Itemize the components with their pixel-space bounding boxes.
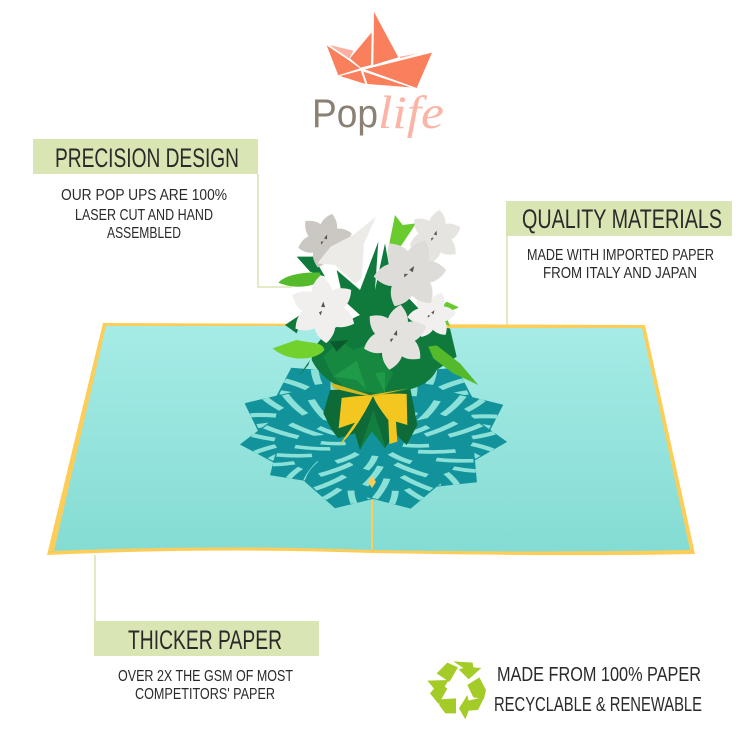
callout: precision design [33, 139, 258, 242]
bright leaves [278, 272, 322, 287]
white lilies [290, 207, 360, 275]
stems [323, 387, 417, 450]
bouquet [273, 205, 478, 450]
leaves dark [312, 242, 457, 394]
icon: paper boat [327, 12, 432, 88]
heading: THICKER PAPER [128, 625, 282, 655]
heading band [33, 139, 258, 174]
body text: LASER CUT AND HAND [75, 207, 213, 224]
stem highlight [360, 410, 386, 449]
connector lines [95, 174, 507, 621]
body text: OUR POP UPS ARE 100% [61, 187, 227, 204]
heading: PRECISION DESIGN [55, 143, 239, 173]
body text: COMPETITORS' PAPER [135, 686, 275, 703]
card yellow backing [47, 323, 695, 555]
pop-up card [47, 205, 695, 555]
body text [118, 668, 293, 703]
card teal right panel [373, 328, 690, 552]
body text [61, 187, 227, 242]
mid leaves [323, 340, 393, 393]
back leaves [285, 257, 325, 377]
callout: quality materials [506, 201, 732, 282]
logo: Poplife [312, 12, 444, 139]
lily: side trumpet [317, 217, 376, 283]
wordmark life: life [378, 87, 444, 139]
card teal left panel [54, 326, 371, 551]
bow [339, 394, 407, 446]
body text: ASSEMBLED [107, 225, 181, 242]
mandala cut-out [224, 353, 523, 515]
callout: thicker paper [94, 621, 319, 703]
wordmark Pop: Pop [312, 92, 378, 136]
centre slot diamond [368, 476, 376, 488]
body text [527, 247, 714, 282]
heading band [506, 201, 732, 236]
recycling note [427, 661, 702, 719]
heading band [94, 621, 319, 656]
ribbon band [331, 383, 408, 397]
icon: recycle arrows [427, 661, 486, 719]
body text: OVER 2X THE GSM OF MOST [118, 668, 293, 685]
centre fold [371, 505, 373, 552]
body text: FROM ITALY AND JAPAN [543, 265, 697, 282]
